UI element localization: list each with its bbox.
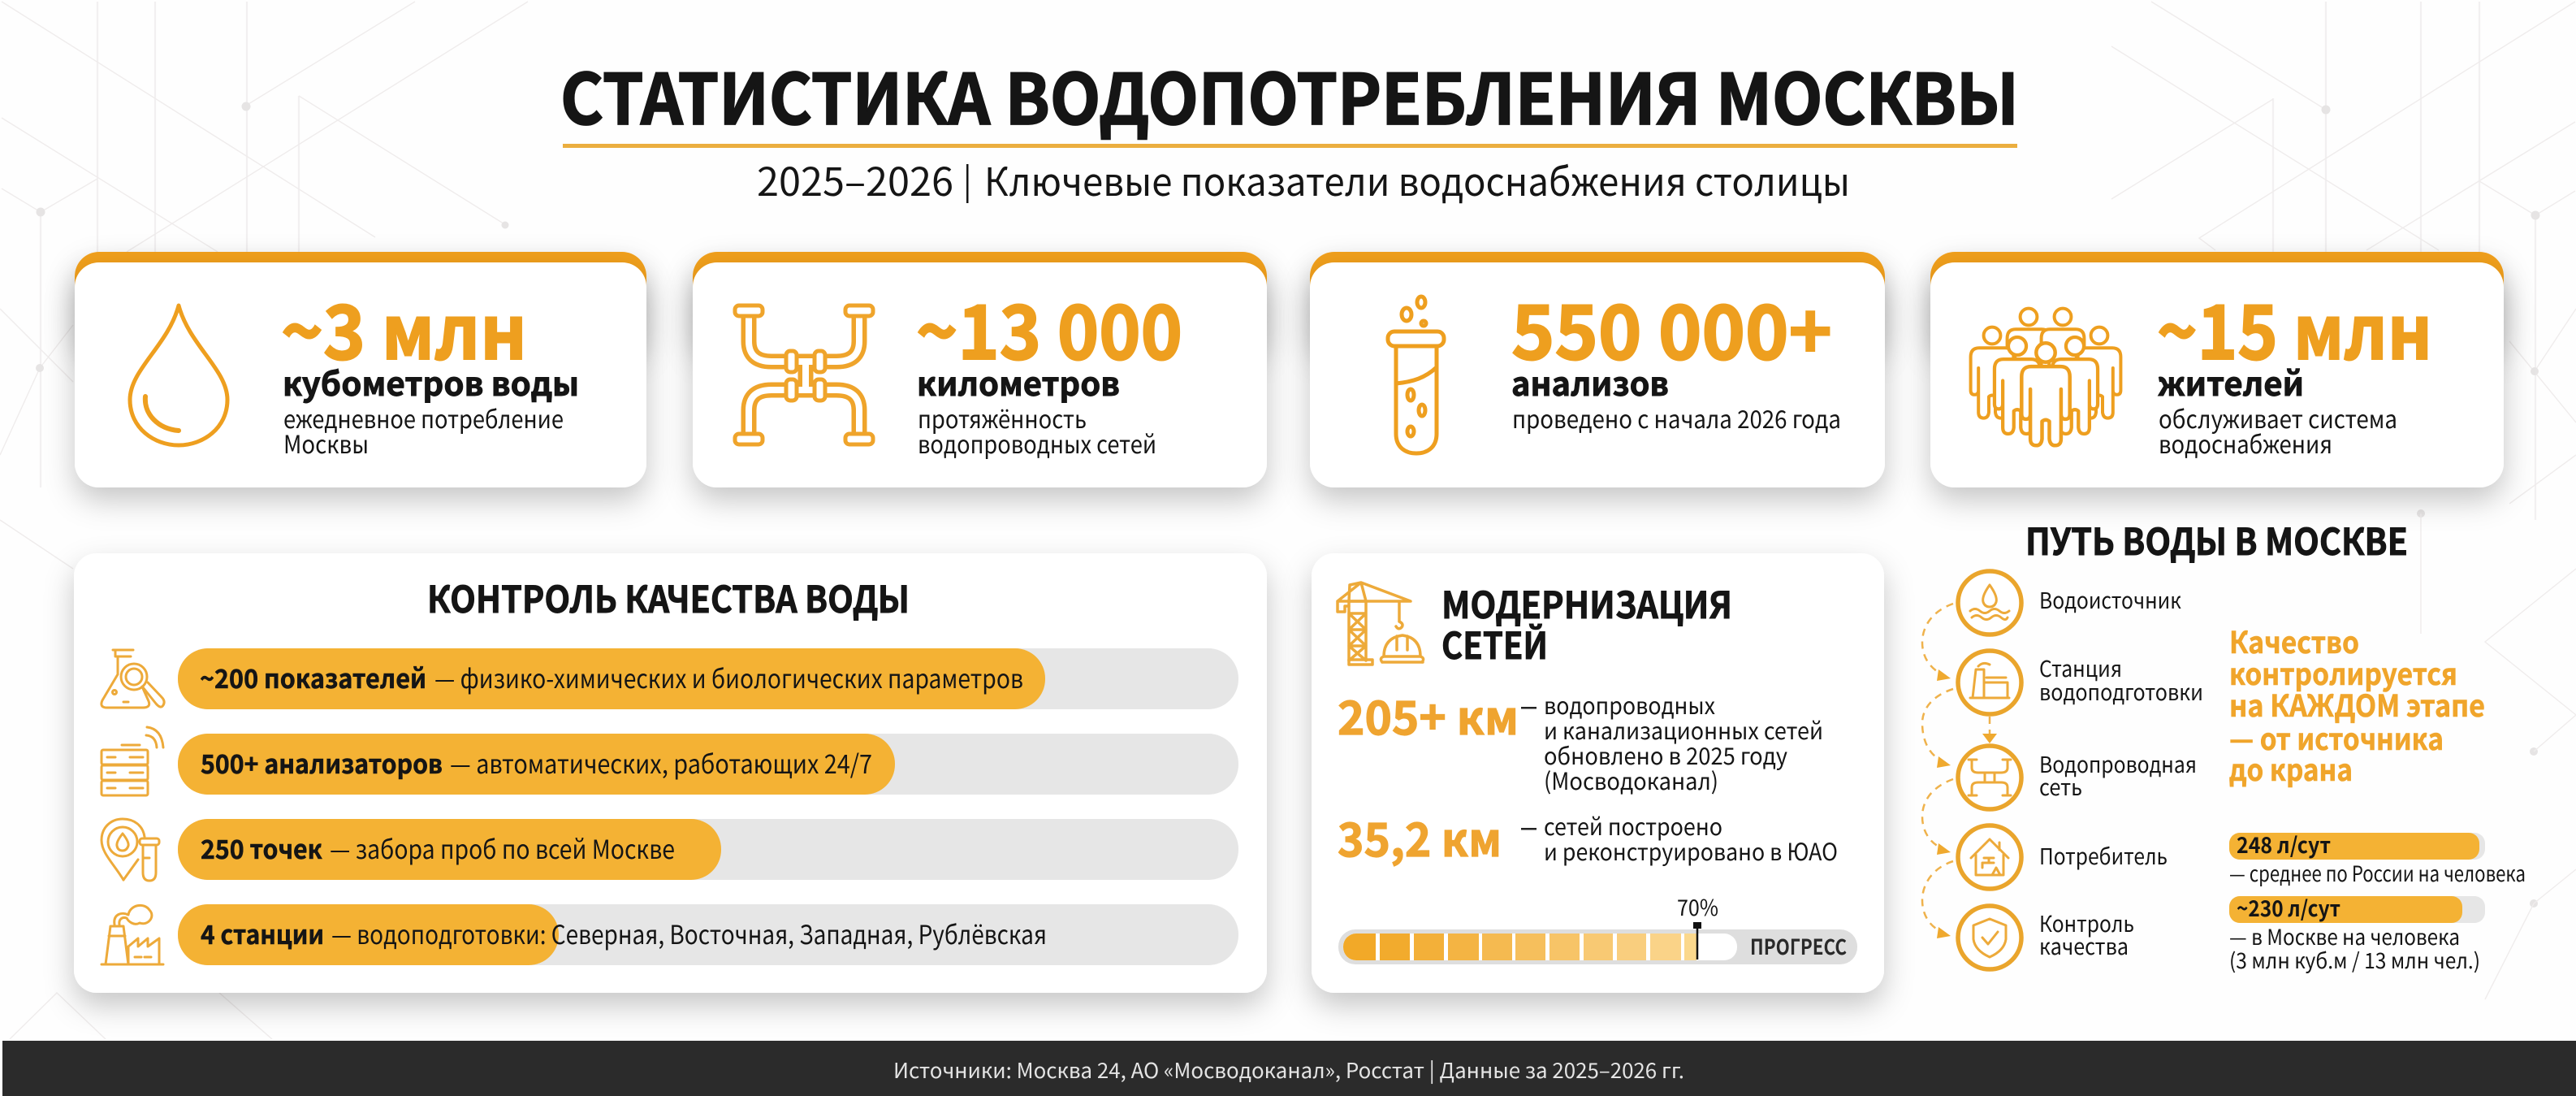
step: treatment station [1958, 651, 2203, 714]
stat: 205 km: и канализационных сетей [1544, 713, 1823, 747]
callout: quality at every stage: Качество [2229, 618, 2359, 662]
icon: crane and helmet [1338, 583, 1424, 665]
bar: indicators: — физико-химических и биологических параметров [434, 659, 1023, 696]
description [918, 400, 1156, 461]
heading: КОНТРОЛЬ КАЧЕСТВА ВОДЫ [427, 570, 910, 623]
icon: analyzers server [102, 727, 163, 795]
icon: pipes [735, 305, 873, 444]
bar: sampling points: — забора проб по всей Москве [330, 830, 675, 867]
bar: Russia average: — среднее по России на человека [2229, 856, 2526, 888]
step: water source [1958, 571, 2181, 635]
subtitle: 2025–2026 [757, 150, 953, 207]
bar: Moscow average: ~230 л/сут [2237, 891, 2340, 923]
bar: Russia average [2229, 828, 2526, 888]
heading: ПУТЬ ВОДЫ В МОСКВЕ [2025, 513, 2408, 565]
step: water network [1958, 746, 2197, 809]
heading [1441, 576, 1732, 669]
stat: 205 km: (Мосводоканал) [1544, 763, 1718, 797]
panel: water quality control [74, 553, 1267, 993]
step: treatment station: водоподготовки [2039, 674, 2203, 707]
title: СТАТИСТИКА ВОДОПОТРЕБЛЕНИЯ МОСКВЫ [560, 43, 2019, 145]
description [2159, 400, 2397, 461]
description: ежедневное потребление [283, 400, 564, 435]
panel: network modernization [1312, 553, 1884, 993]
value: 15 million: ~15 млн [2157, 273, 2432, 381]
bar: sampling points: 250 точек [201, 830, 323, 867]
footer [2, 1041, 2576, 1096]
callout: quality at every stage: контролируется [2229, 650, 2457, 694]
stat: 205 km [1338, 682, 1823, 797]
progress bar: ПРОГРЕСС [1750, 931, 1847, 961]
bar: analyzers [178, 734, 1238, 795]
icon: people [1971, 309, 2120, 445]
bar: indicators [178, 648, 1238, 709]
title underline [563, 144, 2017, 148]
label: cubic metres: кубометров воды [283, 358, 579, 405]
panel: card pipe length [693, 252, 1267, 487]
icon: sampling point [102, 819, 159, 881]
progress bar: 70% [1677, 890, 1718, 922]
bar: sampling points [178, 819, 1238, 880]
stat: 35.2 km: 35,2 км [1338, 804, 1502, 870]
description: Москвы [283, 425, 369, 461]
bar: Russia average: 248 л/сут [2237, 828, 2331, 860]
bar: stations [178, 904, 1238, 965]
bar: stations: 4 станции [201, 915, 324, 952]
icon: test tube [1388, 297, 1444, 453]
callout: quality at every stage [2229, 618, 2485, 790]
step: treatment station: Станция [2039, 651, 2122, 683]
stat: 35.2 km: и реконструировано в ЮАО [1544, 834, 1838, 868]
bar: Moscow average [2229, 891, 2485, 975]
step: quality control [1958, 906, 2134, 969]
label: analyses: анализов [1511, 358, 1669, 405]
icon: water drop [130, 305, 227, 445]
heading: СЕТЕЙ [1441, 617, 1548, 669]
bar: analyzers: — автоматических, работающих 24/7 [450, 744, 872, 782]
description: протяжённость [918, 400, 1087, 435]
panel: card residents [1930, 252, 2504, 487]
step: water network: сеть [2039, 769, 2082, 802]
bar: stations: — водоподготовки: Северная, Восточная, Западная, Рублёвская [331, 915, 1047, 952]
stat: 205 km: водопроводных [1544, 687, 1715, 721]
description: проведено с начала 2026 года [1512, 400, 1841, 435]
icon: flask with magnifier [102, 650, 164, 708]
value: 13000: ~13 000 [916, 273, 1182, 381]
panel: card analyses [1310, 252, 1885, 487]
stat: 35.2 km [1338, 804, 1838, 870]
step: consumer [1958, 825, 2168, 889]
description: водопроводных сетей [918, 425, 1156, 461]
subtitle: Ключевые показатели водоснабжения столицы [984, 150, 1850, 207]
value: 550000: 550 000+ [1511, 273, 1832, 381]
heading: МОДЕРНИЗАЦИЯ [1441, 576, 1732, 629]
step: quality control: Контроль [2039, 906, 2134, 938]
progress bar [1338, 899, 1857, 964]
bar: Moscow average: (3 млн куб.м / 13 млн чел.) [2229, 943, 2480, 975]
callout: quality at every stage: — от источника [2229, 715, 2444, 759]
stat: 35.2 km: сетей построено [1544, 808, 1722, 843]
callout: quality at every stage: до крана [2229, 746, 2353, 790]
panel: water path [1922, 513, 2526, 975]
bar: indicators: ~200 показателей [200, 659, 426, 696]
stat: 205 km: обновлено в 2025 году [1544, 738, 1787, 772]
bar: Moscow average: — в Москве на человека [2229, 920, 2460, 951]
value: 3 million: ~3 млн [281, 273, 527, 381]
step: consumer: Потребитель [2039, 838, 2168, 871]
bar: analyzers: 500+ анализаторов [201, 744, 443, 782]
description [283, 400, 564, 461]
label: residents: жителей [2158, 358, 2304, 405]
arrows: dashed flow [1922, 604, 1997, 938]
footer: Источники: Москва 24, АО «Мосводоканал», Росстат | Данные за 2025–2026 гг. [893, 1055, 1684, 1085]
stat: 205 km: 205+ км [1338, 682, 1519, 748]
description: обслуживает система [2159, 400, 2397, 435]
label: kilometres: километров [917, 358, 1120, 405]
step: water source: Водоисточник [2039, 583, 2181, 615]
icon: treatment plant [102, 905, 163, 964]
step: quality control: качества [2039, 929, 2129, 961]
step: water network: Водопроводная [2039, 747, 2197, 779]
panel: card water volume [75, 252, 646, 487]
callout: quality at every stage: на КАЖДОМ этапе [2229, 682, 2485, 726]
description: водоснабжения [2159, 425, 2332, 461]
